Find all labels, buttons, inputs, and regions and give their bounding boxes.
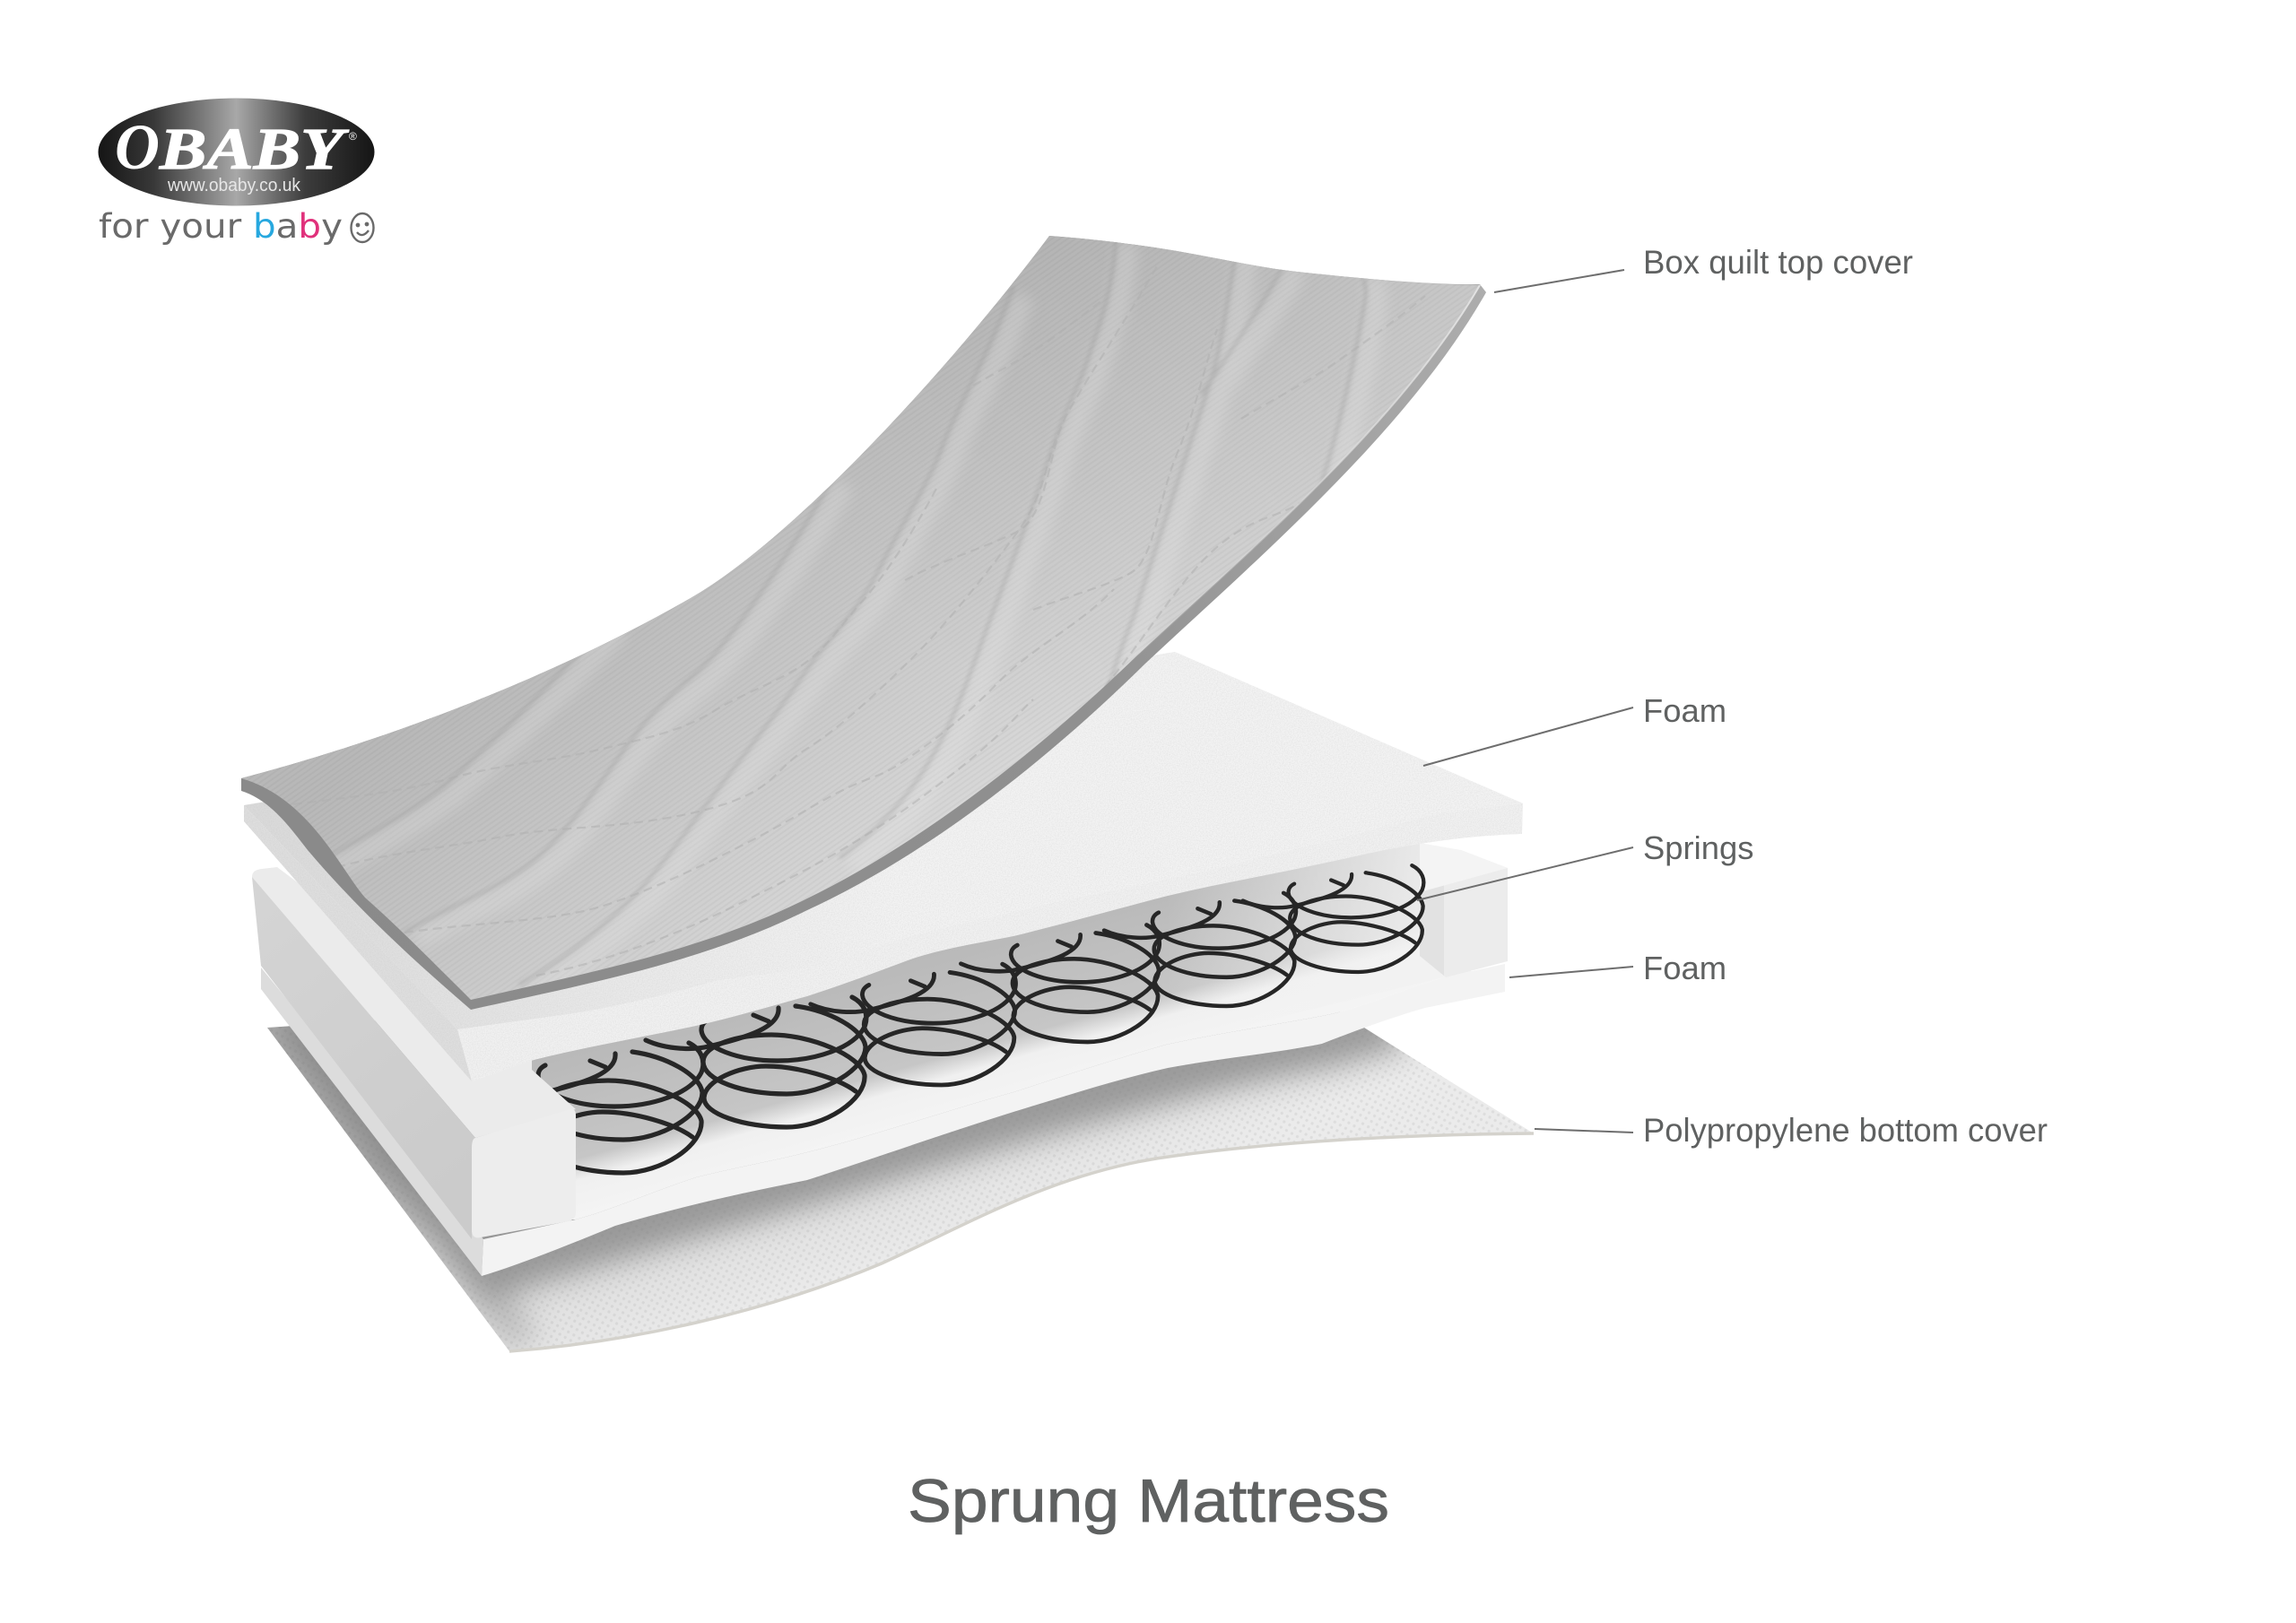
logo wordmark: O <box>115 111 160 183</box>
logo: Obaby <box>99 99 375 246</box>
logo oval <box>99 99 375 206</box>
upper foam layer <box>233 646 1534 1094</box>
polypropylene bottom cover <box>267 974 1534 1351</box>
logo url: www.obaby.co.uk <box>167 176 301 195</box>
springs <box>483 865 1423 1173</box>
quilt ridges: crease <box>296 233 1366 985</box>
label: springs: Springs <box>1643 829 1753 866</box>
right foam edge block <box>1420 843 1508 977</box>
box quilt top cover <box>233 224 1489 1013</box>
label: polypropylene bottom cover: Polypropylene bottom cover <box>1643 1112 2048 1149</box>
title: Sprung Mattress <box>908 1467 1389 1535</box>
lower foam layer <box>261 789 1505 1276</box>
logo wordmark: BABY <box>159 117 350 182</box>
cover highlight edge <box>1138 285 1480 655</box>
icon: baby face <box>352 213 373 242</box>
quilt ridges: soft highlight <box>307 242 1377 994</box>
label: foam lower: Foam <box>1643 950 1726 986</box>
cover quilted surface <box>241 236 1480 1000</box>
label: box quilt top cover: Box quilt top cover <box>1643 244 1913 281</box>
mattress illustration <box>233 224 1534 1351</box>
label: foam upper: Foam <box>1643 692 1726 729</box>
cover thickness edge <box>241 236 1486 1010</box>
logo tagline: for your baby <box>99 207 343 246</box>
quilt stitching <box>279 266 1425 976</box>
logo wordmark <box>115 111 357 183</box>
logo wordmark: ® <box>349 130 357 143</box>
callout lines <box>1417 270 1633 1133</box>
left foam edge block <box>252 867 576 1239</box>
